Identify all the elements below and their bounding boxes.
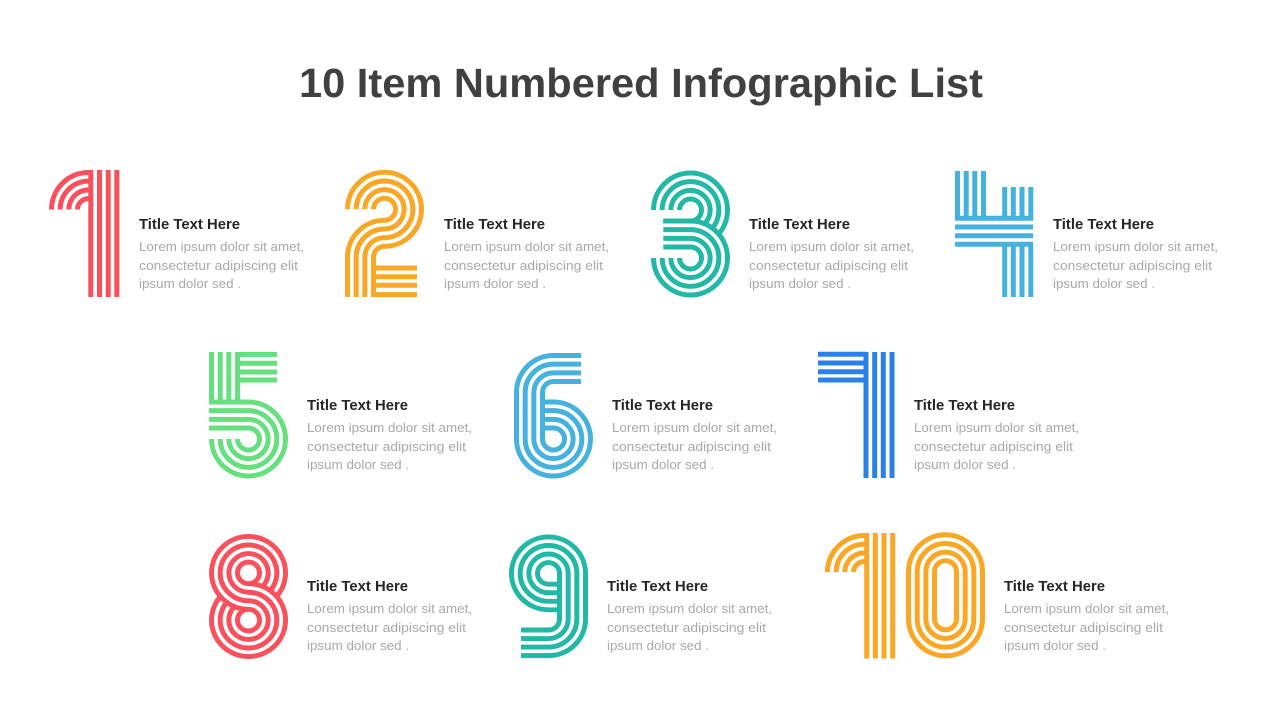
text block 6: ipsum dolor sed . (612, 457, 714, 472)
text block 6: consectetur adipiscing elit (612, 439, 771, 454)
text block 2 (444, 217, 609, 291)
text block 5 (307, 398, 472, 472)
text block 1: ipsum dolor sed . (139, 276, 241, 291)
text block 4: Title Text Here (1053, 217, 1154, 233)
text block 5: consectetur adipiscing elit (307, 439, 466, 454)
text block 7: ipsum dolor sed . (914, 457, 1016, 472)
text block 6 (612, 398, 777, 472)
text block 5: Title Text Here (307, 398, 408, 414)
icon: numeral 5 (209, 352, 286, 476)
text block 7: Title Text Here (914, 398, 1015, 414)
text block 6: Title Text Here (612, 398, 713, 414)
icon: numeral 8 (212, 536, 286, 657)
text block 7 (914, 398, 1079, 472)
text block 3: ipsum dolor sed . (749, 276, 851, 291)
text block 3 (749, 217, 914, 291)
text block 9: consectetur adipiscing elit (607, 620, 766, 635)
icon: numeral 7 (818, 352, 892, 478)
item 3 (654, 173, 914, 295)
text block 7: consectetur adipiscing elit (914, 439, 1073, 454)
text block 4 (1053, 217, 1218, 291)
text block 4: ipsum dolor sed . (1053, 276, 1155, 291)
icon: numeral 6 (516, 356, 590, 476)
text block 8 (307, 579, 472, 653)
item 5 (209, 352, 472, 476)
icon: numeral 10 (827, 533, 982, 658)
text block 6: Lorem ipsum dolor sit amet, (612, 420, 777, 435)
text block 8: ipsum dolor sed . (307, 638, 409, 653)
text block 7: Lorem ipsum dolor sit amet, (914, 420, 1079, 435)
text block 1: Title Text Here (139, 217, 240, 233)
text block 2: Lorem ipsum dolor sit amet, (444, 239, 609, 254)
item 4 (955, 171, 1218, 297)
text block 9: Lorem ipsum dolor sit amet, (607, 601, 772, 616)
text block 10: ipsum dolor sed . (1004, 638, 1106, 653)
title: 10 Item Numbered Infographic List (299, 60, 983, 106)
text block 8: consectetur adipiscing elit (307, 620, 466, 635)
icon: numeral 3 (654, 173, 728, 295)
icon: numeral 2 (348, 172, 422, 297)
item 6 (516, 356, 777, 476)
text block 5: ipsum dolor sed . (307, 457, 409, 472)
item 1 (52, 170, 304, 297)
icon: numeral 1 (52, 170, 117, 297)
text block 10: Lorem ipsum dolor sit amet, (1004, 601, 1169, 616)
icon: numeral 4 (955, 171, 1033, 297)
text block 9: Title Text Here (607, 579, 708, 595)
text block 2: Title Text Here (444, 217, 545, 233)
text block 10: consectetur adipiscing elit (1004, 620, 1163, 635)
text block 8: Title Text Here (307, 579, 408, 595)
text block 9: ipsum dolor sed . (607, 638, 709, 653)
text block 10: Title Text Here (1004, 579, 1105, 595)
item 8 (212, 536, 472, 657)
text block 4: consectetur adipiscing elit (1053, 258, 1212, 273)
text block 4: Lorem ipsum dolor sit amet, (1053, 239, 1218, 254)
text block 5: Lorem ipsum dolor sit amet, (307, 420, 472, 435)
item 9 (512, 537, 772, 656)
text block 8: Lorem ipsum dolor sit amet, (307, 601, 472, 616)
text block 3: Lorem ipsum dolor sit amet, (749, 239, 914, 254)
text block 2: consectetur adipiscing elit (444, 258, 603, 273)
item 10 (827, 533, 1169, 658)
text block 2: ipsum dolor sed . (444, 276, 546, 291)
text block 1 (139, 217, 304, 291)
text block 3: Title Text Here (749, 217, 850, 233)
item 2 (348, 172, 609, 297)
icon: numeral 9 (512, 537, 586, 656)
text block 10 (1004, 579, 1169, 653)
item 7 (818, 352, 1079, 478)
text block 1: consectetur adipiscing elit (139, 258, 298, 273)
text block 3: consectetur adipiscing elit (749, 258, 908, 273)
text block 9 (607, 579, 772, 653)
text block 1: Lorem ipsum dolor sit amet, (139, 239, 304, 254)
